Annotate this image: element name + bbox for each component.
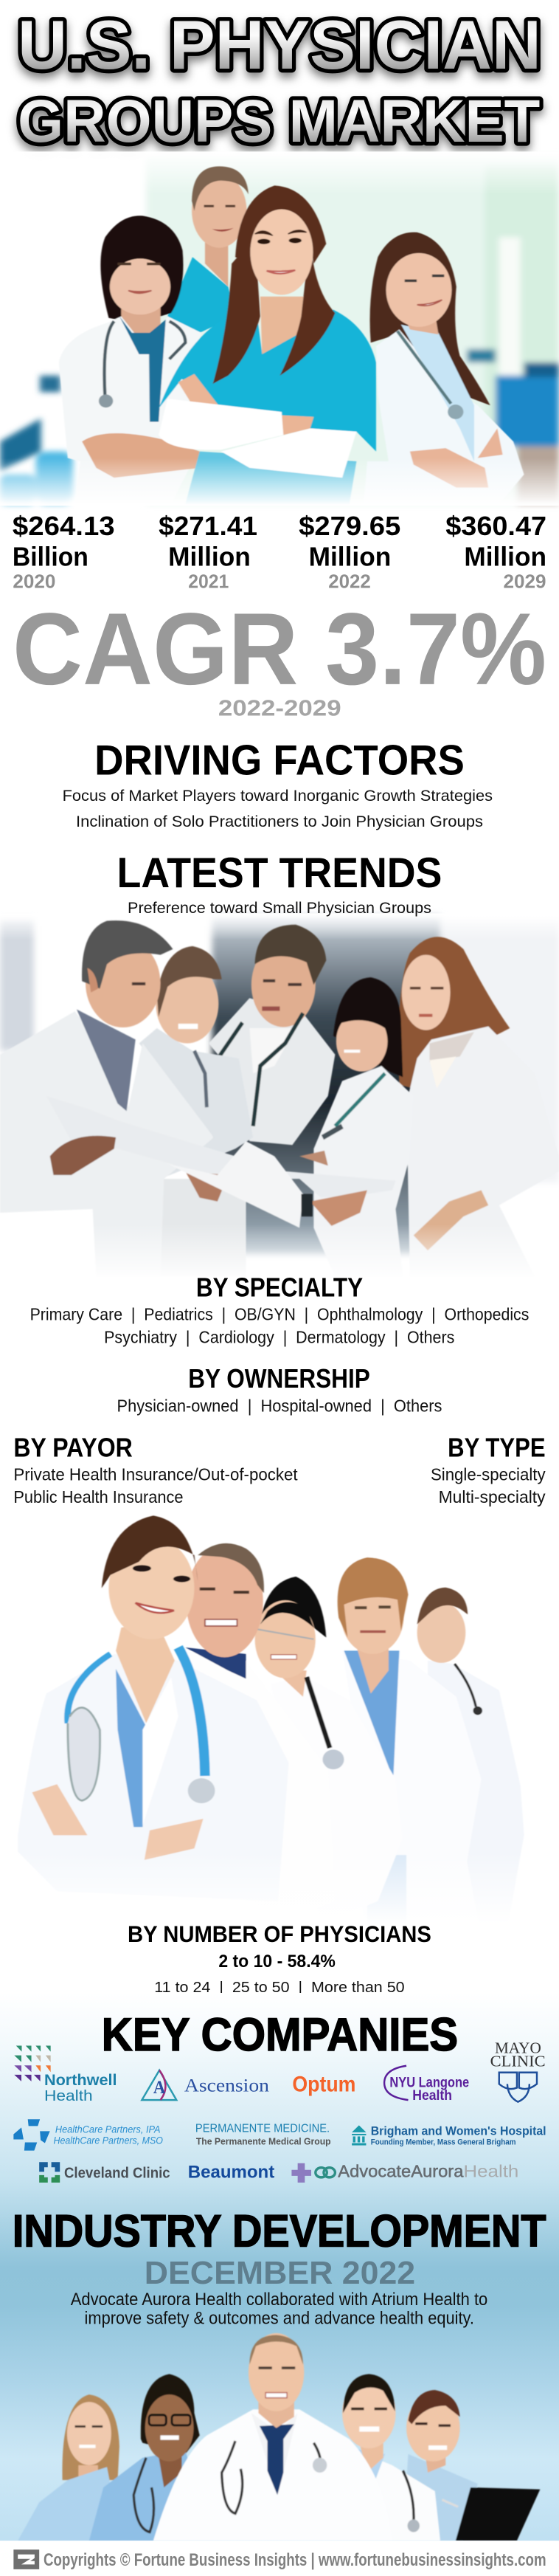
logo: NYU Langone Health: Health [412, 2087, 452, 2103]
latest trends section: Preference toward Small Physician Groups [128, 899, 431, 917]
2020 value [13, 512, 115, 593]
segment: by ownership: Physician-owned | Hospital-owned | Others [117, 1396, 442, 1416]
logo: Permanente Medicine [195, 2122, 331, 2147]
doctor five, far right [398, 937, 559, 1277]
logo: NYU Langone Health: NYU Langone [389, 2074, 469, 2090]
latest trends section: LATEST TRENDS [117, 849, 442, 896]
segment: by type: Single-specialty [431, 1464, 546, 1484]
2021 value [159, 512, 257, 593]
2021 value: $271.41 [159, 512, 257, 541]
2029 value: 2029 [504, 571, 546, 593]
logo: Mayo Clinic [490, 2040, 546, 2102]
segment: by specialty: Primary Care | Pediatrics | OB/GYN | Ophthalmology | Orthopedics [30, 1304, 529, 1324]
logo: Brigham and Women's Hospital: Founding Member, Mass General Brigham [371, 2138, 515, 2147]
fourth doctor [338, 1557, 482, 1934]
logo: Advocate Aurora Health: AdvocateAurora [338, 2161, 464, 2180]
2021 value: 2021 [188, 571, 229, 593]
doctor one, man in front [0, 920, 214, 1277]
company logos [13, 2040, 546, 2183]
bottom gradient panel [0, 1993, 559, 2541]
2020 value: 2020 [13, 571, 55, 593]
logo: Cleveland Clinic: Cleveland Clinic [64, 2165, 170, 2181]
doctor, centre man with tie [153, 2333, 392, 2541]
segment: by number of physicians [128, 1921, 431, 1996]
2020 value: $264.13 [13, 512, 115, 541]
2022 value: Million [309, 542, 391, 571]
third doctor with glasses [255, 1577, 403, 1924]
2022 value: $279.65 [299, 512, 400, 541]
market size values by year [13, 512, 546, 593]
left doctor with dark hair [59, 216, 201, 504]
2029 value [445, 512, 546, 593]
segment: by ownership [117, 1365, 442, 1416]
photo: doctors reviewing a document [0, 913, 559, 1281]
logo: HealthCare Partners: HealthCare Partners, MSO [54, 2135, 163, 2146]
industry development section: INDUSTRY DEVELOPMENT [13, 2205, 546, 2256]
nurse with glasses [89, 2374, 210, 2541]
logo: HealthCare Partners [13, 2119, 163, 2151]
logo: Northwell Health: Northwell [44, 2072, 117, 2089]
logo: Permanente Medicine: PERMANENTE MEDICINE. [195, 2122, 330, 2135]
fifth doctor [417, 1588, 524, 1934]
latest trends section [117, 849, 442, 917]
title [18, 6, 541, 154]
CAGR callout: 2022-2029 [218, 695, 341, 720]
segment: by number of physicians: 2 to 10 - 58.4% [218, 1952, 336, 1971]
logo: Northwell Health [14, 2046, 117, 2104]
logo: Northwell Health: Health [44, 2088, 93, 2104]
logo: HealthCare Partners: HealthCare Partners, IPA [55, 2124, 161, 2135]
segment: by payor [13, 1434, 298, 1506]
logo: Ascension: Ascension [184, 2076, 269, 2096]
segment: by specialty: BY SPECIALTY [196, 1274, 363, 1303]
segment: by payor: Public Health Insurance [13, 1487, 183, 1506]
photo: hero team of four medical staff [0, 151, 559, 506]
logo: Beaumont: Beaumont [188, 2163, 274, 2183]
logo: Ascension [142, 2070, 269, 2100]
industry development section [13, 2205, 546, 2327]
segment: by specialty: Psychiatry | Cardiology | Dermatology | Others [104, 1327, 454, 1347]
nurse, far left [18, 2394, 121, 2541]
logo: Ascension: A [153, 2078, 165, 2098]
segment: by payor: BY PAYOR [13, 1434, 133, 1463]
logo: Mayo Clinic: MAYO [495, 2040, 541, 2057]
nurse with clipboard [403, 2390, 540, 2541]
key companies heading: KEY COMPANIES [102, 2009, 458, 2061]
icon: Fortune Business Insights logo [13, 2549, 39, 2569]
photo: line of five doctors in white coats [0, 1515, 559, 2002]
2020 value: Billion [13, 542, 88, 571]
logo: Mayo Clinic: CLINIC [490, 2053, 546, 2070]
segment: by ownership: BY OWNERSHIP [188, 1365, 370, 1394]
segment: by specialty [30, 1274, 529, 1347]
footer band [0, 2541, 559, 2576]
segment: by number of physicians: 11 to 24 | 25 to 50 | More than 50 [154, 1979, 405, 1996]
right doctor with long brown hair [364, 233, 524, 504]
logo: Cleveland Clinic [39, 2162, 170, 2183]
back man in scrubs [167, 166, 249, 333]
doctor three, centre man [209, 925, 335, 1145]
doctor four, dark hair [313, 977, 414, 1277]
industry development section: Advocate Aurora Health collaborated with Atrium Health to [71, 2290, 487, 2309]
centre nurse in turquoise scrubs [159, 185, 376, 504]
driving factors section [63, 737, 493, 830]
second doctor, older man [185, 1543, 335, 1924]
segment: by type: Multi-specialty [439, 1487, 546, 1506]
logo: NYU Langone Health [384, 2066, 469, 2103]
segment: by number of physicians: BY NUMBER OF PHYSICIANS [128, 1921, 431, 1947]
logo: Advocate Aurora Health: Health [463, 2161, 518, 2180]
2022 value [299, 512, 400, 593]
segment: by type: BY TYPE [448, 1434, 546, 1463]
doctor with dark tied hair [342, 2374, 440, 2541]
2021 value: Million [168, 542, 251, 571]
doctor two, smiling woman [139, 946, 253, 1277]
segment: by payor: Private Health Insurance/Out-of-pocket [13, 1464, 298, 1484]
logo: Permanente Medicine: The Permanente Medical Group [196, 2136, 331, 2147]
industry development section: DECEMBER 2022 [145, 2255, 415, 2290]
logo: Advocate Aurora Health [291, 2161, 518, 2183]
logo: Brigham and Women's Hospital: Brigham and Women's Hospital [371, 2124, 546, 2138]
2022 value: 2022 [328, 571, 371, 593]
document and hands [46, 1096, 396, 1227]
first doctor, smiling woman [18, 1515, 289, 1901]
segment: by type [431, 1434, 546, 1506]
logo: Optum: Optum [292, 2073, 355, 2097]
logo: Brigham and Women's Hospital [352, 2124, 546, 2147]
industry development section: improve safety & outcomes and advance health equity. [85, 2308, 474, 2327]
photo: five medical staff on blue background [18, 2333, 540, 2541]
